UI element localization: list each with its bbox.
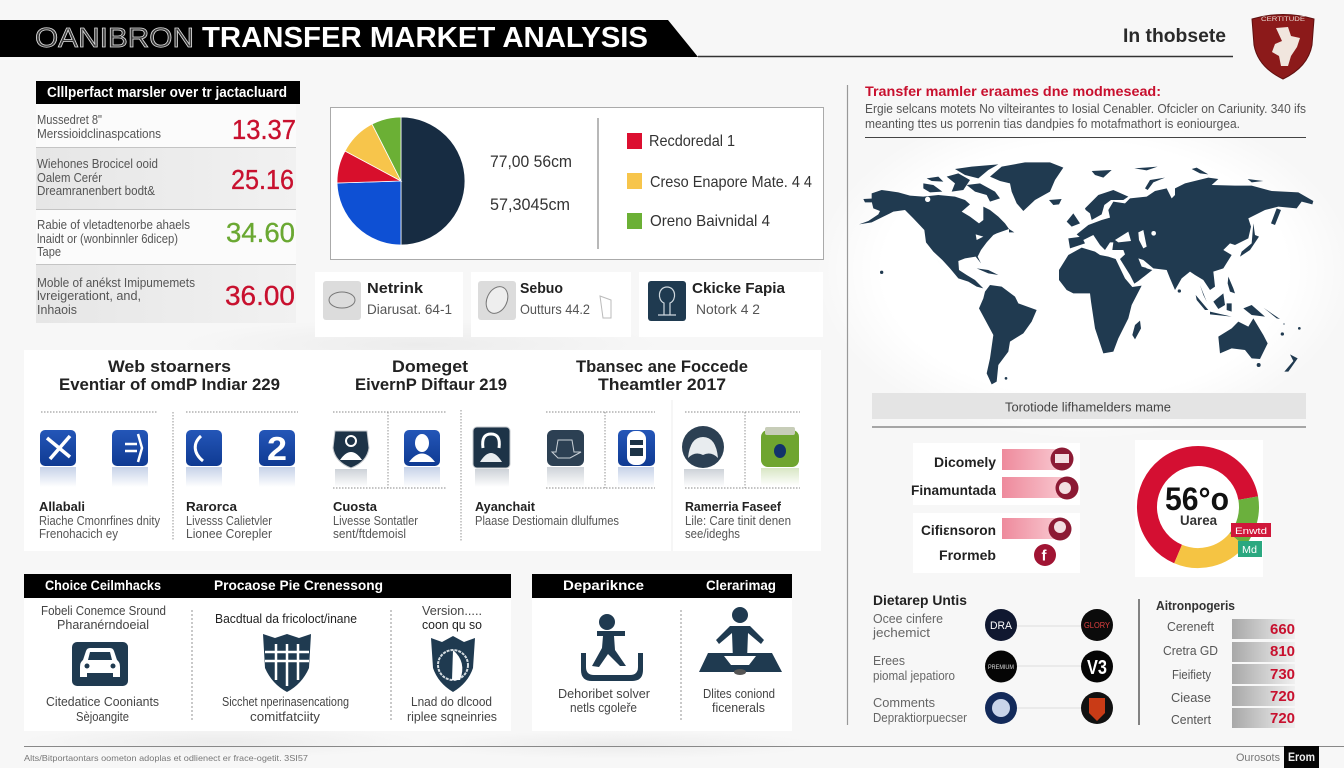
column captions: see/ideghs <box>685 527 740 541</box>
panel: choice and process: Pharanérndoeial <box>57 618 149 632</box>
map heading: Transfer mamler eraames dne modmesead: <box>865 83 1161 99</box>
panel: bar labels with icons <box>911 443 1080 573</box>
panel: world overview <box>848 83 1313 725</box>
icon: bracket <box>186 430 222 466</box>
badge pair row 2: V3 <box>1087 657 1107 679</box>
metric row 2 <box>36 148 296 210</box>
panel heading bar <box>24 574 511 598</box>
icon: person on platform <box>581 614 643 681</box>
group headings: Tbansec ane Foccede <box>576 358 748 376</box>
metric row 3: Tape <box>37 245 61 259</box>
panel: directory units: piomal jepatioro <box>873 669 955 683</box>
panel: ranking values: 730 <box>1270 666 1295 683</box>
bar: Cifiensoron: Cifiεnsoron <box>921 522 996 538</box>
badge pair row 2: PREMIUM <box>988 665 1014 671</box>
header subtitle: In thobsete <box>1123 26 1226 47</box>
panel heading bar: Choice Ceilmhacks <box>45 577 161 593</box>
table heading: Clllperfact marsler over tr jactacluard <box>47 85 287 101</box>
column captions: Lionee Corepler <box>186 527 272 541</box>
metric row 2: Wiehones Brocicel ooid <box>37 157 158 171</box>
column captions: Lile: Care tinit denen <box>685 514 791 528</box>
card: Ckicke Fapia: Ckicke Fapia <box>692 280 786 297</box>
pie values: 77,00 56cm <box>490 152 572 171</box>
panel: choice and process: Sèjoangite <box>76 710 129 724</box>
panel: donut chart: 56°o <box>1165 481 1229 517</box>
panel: ranking values: Aitronpogeris <box>1156 598 1235 613</box>
column captions: Riache Cmonrfines dnity <box>39 514 161 528</box>
bar: Frormeb: Frormeb <box>939 547 996 563</box>
footer <box>24 746 1344 768</box>
panel heading bar <box>532 574 792 598</box>
card: Sebuo: Outturs 44.2 <box>520 301 590 317</box>
panel: ranking values: Ciease <box>1171 690 1211 705</box>
panel: department and clearing: netls cgoleře <box>570 701 637 715</box>
icon: number two <box>259 430 295 467</box>
pie legend: Recdoredal 1 <box>649 133 735 150</box>
badge pair row 2 <box>985 650 1113 682</box>
column captions: Cuosta <box>333 499 378 514</box>
bar: Dicomely <box>934 448 1074 470</box>
bar: Dicomely: Dicomely <box>934 454 996 470</box>
metric row 1: Merssioidclinaspcations <box>37 127 161 141</box>
pie legend <box>627 133 812 230</box>
panel heading bar: Clerarimag <box>706 577 776 593</box>
metric row 3: lnaidt or (wonbinnler 6dicep) <box>37 232 178 246</box>
metric row 2: 25.16 <box>231 164 294 195</box>
card: Sebuo: Sebuo <box>520 280 563 297</box>
club crest logo: CERTITUDE <box>1261 17 1305 23</box>
panel: directory units: Ocee cinfere <box>873 612 943 626</box>
map caption <box>872 393 1306 419</box>
panel: directory units: Depraktiorpuecser <box>873 711 967 725</box>
panel: directory units: Dietarep Untis <box>873 592 967 608</box>
metric row 4: Moble of anékst Imipumemets <box>37 276 195 290</box>
bar: Cifiensoron <box>921 518 1072 540</box>
metric row 1 <box>36 104 296 148</box>
panel: ranking values: Fieifiety <box>1172 667 1211 682</box>
panel: ranking values: 720 <box>1270 688 1295 705</box>
icon: green cup <box>761 427 799 467</box>
panel: choice and process: Version..... <box>422 604 482 618</box>
map caption: Torotiode lifhamelders mame <box>1005 400 1171 414</box>
panel: donut chart: Uarea <box>1180 512 1217 528</box>
icon: equals sign <box>112 430 148 466</box>
metric row 4: Inhaois <box>37 303 77 317</box>
column captions <box>39 499 791 541</box>
group headings: Web stoarners <box>108 358 231 376</box>
panel: key metrics table <box>36 81 300 323</box>
panel: ranking values <box>1156 598 1295 728</box>
column captions: sent/ftdemoisl <box>333 527 406 541</box>
card: Netrink <box>315 272 463 337</box>
badge pair row 3 <box>985 692 1113 724</box>
title banner: OANIBRON <box>35 22 194 53</box>
column captions: Frenohacich ey <box>39 527 119 541</box>
column captions: Ramerria Faseef <box>685 499 782 514</box>
bar: Finamuntada <box>911 476 1078 500</box>
bar: Frormeb: f <box>1042 548 1048 564</box>
badge pair row 1: GLORY <box>1084 621 1111 630</box>
title banner: TRANSFER MARKET ANALYSIS <box>202 22 648 54</box>
panel: ranking values: 810 <box>1270 643 1295 660</box>
bar: Frormeb <box>939 544 1056 566</box>
column captions: Livesss Calietvler <box>186 514 272 528</box>
panel: choice and process <box>24 574 511 731</box>
metric row 1: 13.37 <box>232 114 296 145</box>
metric row 3: 34.60 <box>226 217 295 248</box>
donut ring <box>1147 456 1249 558</box>
panel: ranking values: 720 <box>1270 710 1295 727</box>
panel: pie chart <box>330 108 824 260</box>
metric row 3 <box>36 210 296 265</box>
pie chart <box>337 117 465 245</box>
card: Netrink: Netrink <box>367 280 424 297</box>
panel: department and clearing: Dehoribet solver <box>558 687 650 701</box>
panel: directory units: Erees <box>873 654 905 668</box>
icon: crest grid shield <box>263 634 311 692</box>
group headings: Theamtler 2017 <box>598 376 726 394</box>
icon: number two: 2 <box>267 430 287 467</box>
world map <box>859 162 1313 384</box>
card: Netrink: Diarusat. 64-1 <box>367 301 452 317</box>
icon: figure on field <box>699 607 782 675</box>
pie legend: Creso Enapore Mate. 4 4 <box>650 174 812 191</box>
icon: phone device <box>618 430 655 466</box>
panel: ranking values: Cereneft <box>1167 619 1214 634</box>
icon: cross tools <box>40 430 76 466</box>
panel heading bar: Procaose Pie Crenessong <box>214 577 383 593</box>
badge pair row 1: DRA <box>990 620 1013 632</box>
panel: directory units: jechemict <box>872 626 931 640</box>
panel: choice and process: Lnad do dlcood <box>411 695 492 709</box>
footer: Ourosots <box>1236 752 1280 764</box>
footer: Erom <box>1288 750 1315 764</box>
panel: directory units: Comments <box>873 696 935 710</box>
panel: department and clearing: ficenerals <box>712 701 765 715</box>
card: Ckicke Fapia: Notork 4 2 <box>696 301 760 317</box>
metric row 1: Mussedret 8" <box>37 113 102 127</box>
pie values: 57,3045cm <box>490 195 570 214</box>
icon: device sketch <box>547 430 584 466</box>
panel heading bar: Depariknce <box>563 577 644 593</box>
panel: ranking values: 660 <box>1270 621 1295 638</box>
table heading <box>36 81 300 104</box>
group headings: Domeget <box>392 358 469 376</box>
column captions: Rarorca <box>186 499 238 514</box>
card: Sebuo <box>471 272 631 337</box>
map description: meanting ttes us porrenin tias dandpies fo motafmathort is eoniourgea. <box>865 117 1240 131</box>
map description: Ergie selcans motets No vilteirantes to Iosial Cenabler. Ofcicler on Cariunity. 340 ifs <box>865 102 1306 116</box>
panel: choice and process: Fobeli Conemce Sround <box>41 604 166 618</box>
panel: department and clearing: Dlites coniond <box>703 687 775 701</box>
panel: department and clearing <box>532 574 792 731</box>
card: Ckicke Fapia <box>639 272 823 337</box>
group headings: EivernP Diftaur 219 <box>355 376 507 394</box>
metric row 4: 36.00 <box>225 280 295 311</box>
metric row 3: Rabie of vletadtenorbe ahaels <box>37 218 190 232</box>
title banner <box>0 20 1233 57</box>
club crest logo <box>1252 14 1314 79</box>
icon: lion shield <box>431 636 475 692</box>
footer: Alts/Bitportaontars oometon adoplas et odlienect er frace-ogetit. 3SI57 <box>24 753 308 763</box>
metric row 2: Oalem Cerér <box>37 171 102 185</box>
metric row 4 <box>36 265 296 323</box>
panel: directory units <box>872 592 1113 725</box>
pie values <box>490 152 572 214</box>
badge pair row 1 <box>985 609 1113 641</box>
panel: choice and process: riplee sqneinries <box>407 710 497 724</box>
column captions: Livesse Sontatler <box>333 514 418 528</box>
donut tag: green: Md <box>1242 545 1257 556</box>
panel: donut chart <box>1135 440 1271 577</box>
column captions: Ayanchait <box>475 499 536 514</box>
panel: choice and process: Bacdtual da fricoloct/inane <box>215 612 357 626</box>
map description <box>865 102 1306 131</box>
icon: dark figure tile <box>473 427 510 468</box>
panel: ranking values: Cretra GD <box>1163 643 1218 658</box>
panel: ranking values: Centert <box>1171 712 1211 727</box>
panel: choice and process: Sicchet nperinasencationg <box>222 695 349 709</box>
pie legend: Oreno Baivnidal 4 <box>650 213 770 230</box>
metric row 2: Dreamranenbert bodt& <box>37 184 156 198</box>
icon: dark shield figure <box>333 431 369 468</box>
icon: person <box>404 430 440 466</box>
icon: car <box>72 642 128 686</box>
bar: Finamuntada: Finamuntada <box>911 482 996 498</box>
group headings <box>59 358 748 394</box>
panel: choice and process: Citedatice Cooniants <box>46 695 159 709</box>
column captions: Plaase Destiomain dlulfumes <box>475 514 619 528</box>
donut tag: red: Enwtd <box>1235 526 1267 537</box>
panel: choice and process: coon qu so <box>422 618 482 632</box>
panel: category icons <box>24 350 821 551</box>
panel: choice and process: comitfatciity <box>250 710 321 724</box>
metric row 4: lvreigerationt, and, <box>37 289 141 303</box>
icon: dark circle arc <box>682 426 724 468</box>
column captions: Allabali <box>39 499 85 514</box>
group headings: Eventiar of omdP Indiar 229 <box>59 376 280 394</box>
